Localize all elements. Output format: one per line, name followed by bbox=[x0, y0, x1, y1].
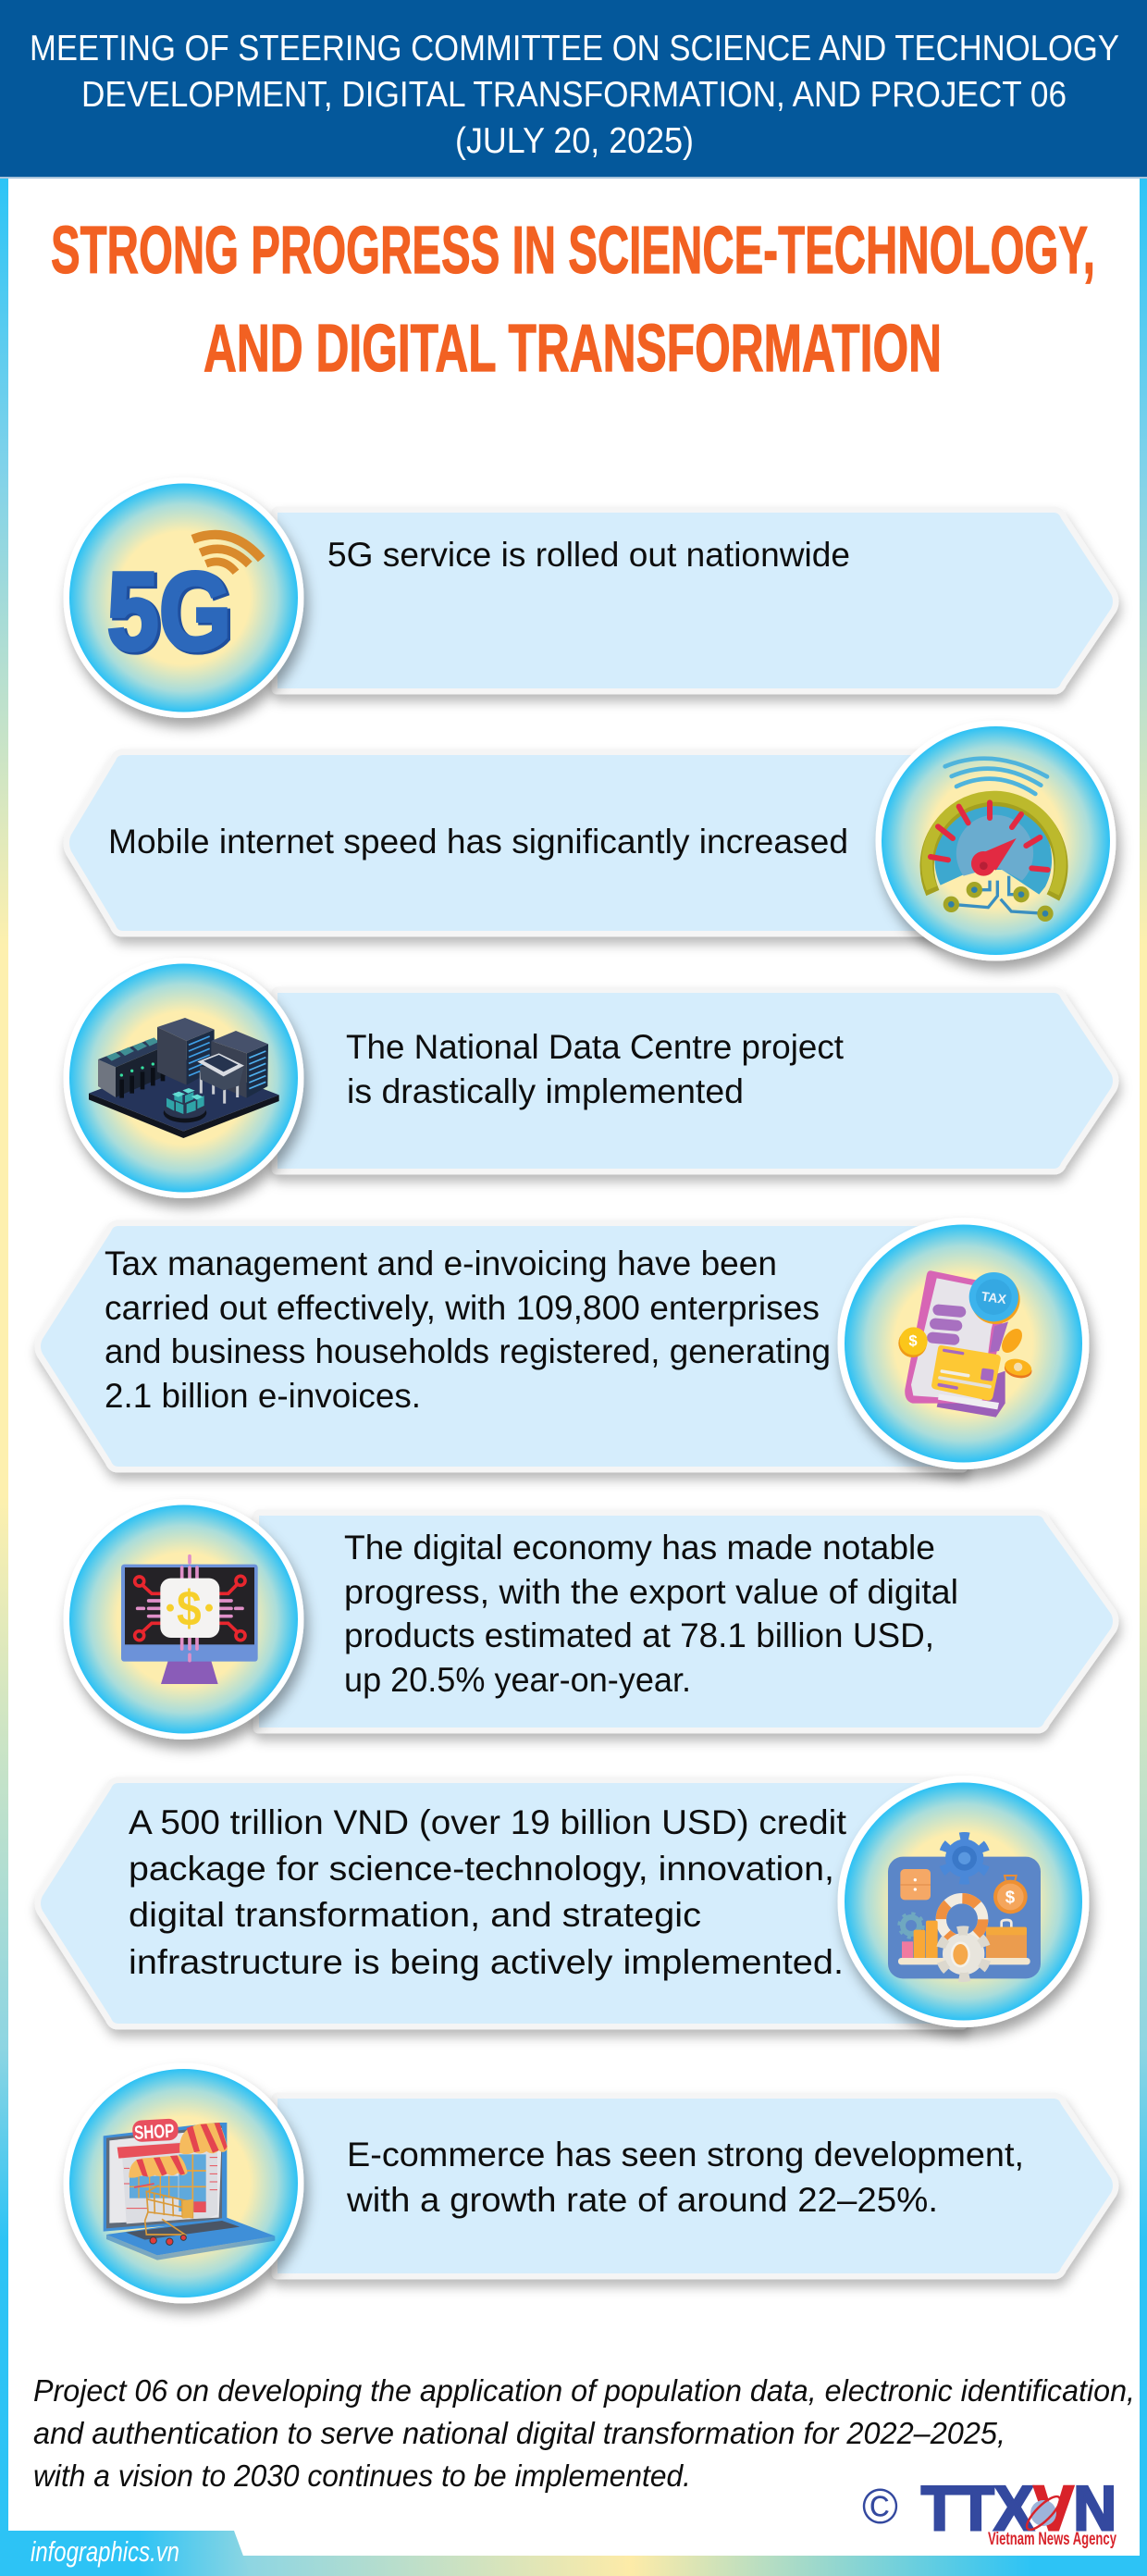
footnote: and authentication to serve national digital transformation for 2022–2025, bbox=[33, 2416, 1005, 2450]
statement text: E-commerce has seen strong development, bbox=[347, 2136, 1024, 2174]
panel: credit package bbox=[41, 1776, 1090, 2027]
icon disc: digital monitor: $ bbox=[177, 1582, 202, 1637]
header banner: DEVELOPMENT, DIGITAL TRANSFORMATION, AND PROJECT 06 bbox=[81, 75, 1067, 115]
arrow banner bbox=[259, 1516, 1113, 1728]
statement text: Mobile internet speed has significantly increased bbox=[108, 823, 848, 861]
statement text: is drastically implemented bbox=[347, 1072, 744, 1110]
statement text: up 20.5% year-on-year. bbox=[344, 1661, 691, 1699]
icon disc: online shop bbox=[63, 2063, 303, 2304]
arrow banner bbox=[278, 513, 1113, 688]
panel: 5G service bbox=[63, 477, 1113, 718]
panel: e-commerce bbox=[63, 2063, 1113, 2304]
panel: tax and e-invoicing bbox=[41, 1218, 1090, 1469]
header banner bbox=[0, 0, 1147, 179]
arrow banner bbox=[278, 993, 1113, 1169]
statement text: 2.1 billion e-invoices. bbox=[105, 1377, 421, 1415]
statement text: Tax management and e-invoicing have been bbox=[105, 1245, 777, 1282]
icon disc: speedometer bbox=[875, 720, 1116, 960]
statement text: The National Data Centre project bbox=[346, 1028, 845, 1066]
panel: digital economy bbox=[63, 1499, 1113, 1740]
statement text: with a growth rate of around 22–25%. bbox=[346, 2181, 938, 2219]
panel: mobile internet speed bbox=[69, 720, 1116, 960]
icon disc: data centre bbox=[63, 958, 303, 1198]
icon disc: innovation board bbox=[838, 1776, 1090, 2027]
statement text: The digital economy has made notable bbox=[344, 1529, 935, 1567]
statement text: package for science-technology, innovation, bbox=[129, 1850, 834, 1888]
icon disc: digital monitor bbox=[63, 1499, 303, 1740]
statement text: products estimated at 78.1 billion USD, bbox=[344, 1616, 934, 1654]
logo: TTXVN Vietnam News Agency: © bbox=[862, 2479, 898, 2534]
panel: national data centre bbox=[63, 958, 1113, 1198]
statement text: carried out effectively, with 109,800 enterprises bbox=[105, 1289, 820, 1327]
arrow banner bbox=[69, 755, 995, 931]
statement text: progress, with the export value of digital bbox=[344, 1573, 958, 1611]
footnote bbox=[33, 2373, 1135, 2493]
statement text: 5G service is rolled out nationwide bbox=[327, 536, 850, 574]
icon disc: innovation board: $ bbox=[1005, 1888, 1016, 1907]
statement text: digital transformation, and strategic bbox=[129, 1896, 701, 1934]
arrow banner bbox=[41, 1226, 962, 1467]
icon disc: online shop: SHOP bbox=[134, 2121, 175, 2144]
statement text bbox=[105, 1245, 831, 1415]
footnote: Project 06 on developing the application of population data, electronic identification, bbox=[33, 2373, 1135, 2408]
statement text: infrastructure is being actively implemented. bbox=[129, 1943, 844, 1981]
icon disc: 5G: 5G bbox=[109, 551, 234, 675]
source: infographics.vn: infographics.vn bbox=[31, 2535, 179, 2568]
icon disc: tax on phone bbox=[838, 1218, 1090, 1469]
title bbox=[51, 214, 1095, 386]
footer band bbox=[0, 2531, 1147, 2576]
header banner: (JULY 20, 2025) bbox=[455, 121, 694, 161]
icon disc: tax on phone: $ bbox=[908, 1332, 918, 1350]
statement text: and business households registered, generating bbox=[105, 1332, 831, 1370]
arrow banner bbox=[41, 1783, 962, 2024]
statement text bbox=[346, 1028, 845, 1110]
statement text bbox=[344, 1529, 958, 1699]
footnote: with a vision to 2030 continues to be implemented. bbox=[33, 2458, 691, 2493]
statement text: A 500 trillion VND (over 19 billion USD) credit bbox=[129, 1803, 847, 1841]
icon disc: 5G bbox=[63, 477, 303, 718]
logo: TTXVN Vietnam News Agency: TTXVN bbox=[921, 2473, 1116, 2544]
arrow banner bbox=[278, 2099, 1113, 2273]
icon disc: tax on phone: TAX bbox=[980, 1289, 1008, 1307]
icon disc: 5G: 5G bbox=[107, 550, 231, 674]
statement text bbox=[346, 2136, 1024, 2219]
statement text bbox=[129, 1803, 847, 1981]
